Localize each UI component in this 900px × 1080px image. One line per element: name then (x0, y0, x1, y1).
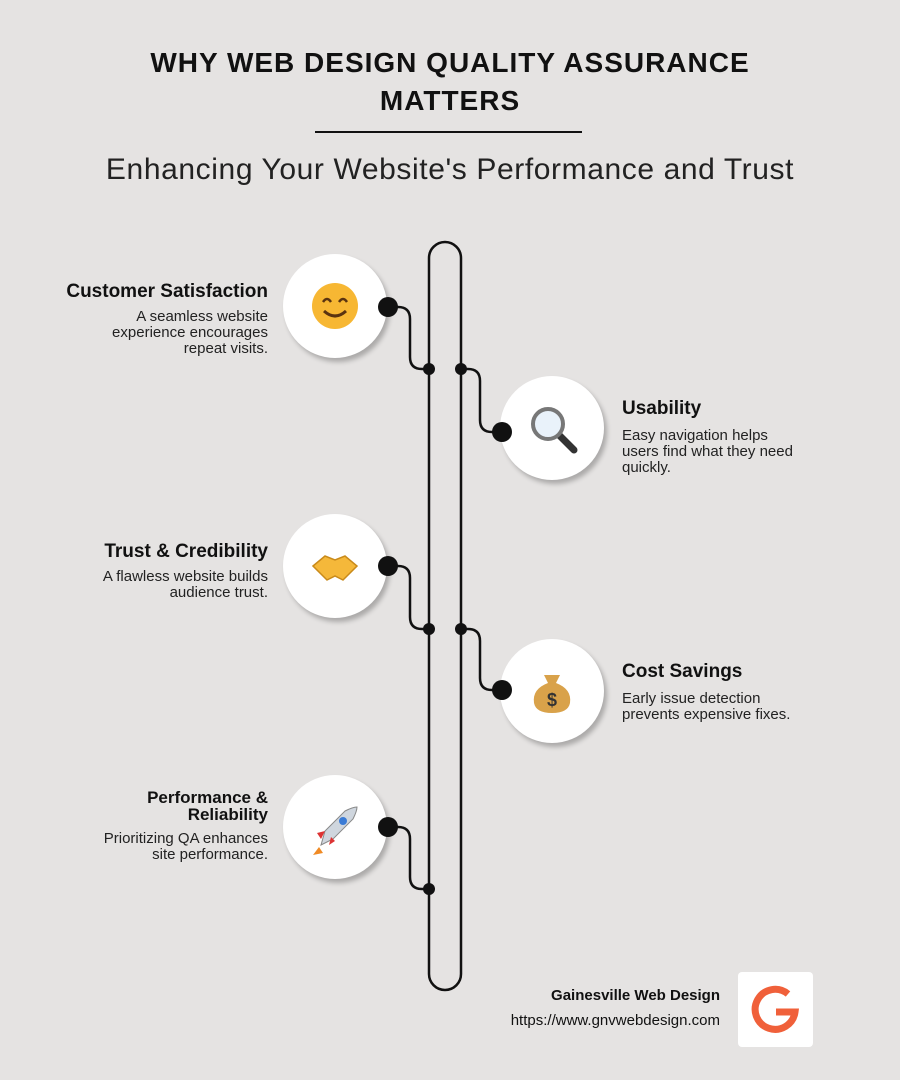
panel: trust: A flawless website builds audience trust. (103, 568, 268, 601)
panel: usability (622, 398, 793, 476)
panel: performance: Prioritizing QA enhances site performance. (104, 830, 268, 863)
title: WHY WEB DESIGN QUALITY ASSURANCE (150, 47, 750, 78)
icon: magnifier (500, 376, 604, 480)
panel: customer satisfaction: Customer Satisfaction (66, 281, 268, 302)
panel: performance: Reliability (188, 805, 268, 824)
footer: company: Gainesville Web Design (551, 987, 720, 1004)
panel: performance: Performance & (147, 788, 268, 807)
icon: smiley (283, 254, 387, 358)
title: MATTERS (380, 85, 520, 116)
panel: trust (103, 541, 268, 601)
subtitle: Enhancing Your Website's Performance and Trust (106, 153, 794, 186)
panel: usability: Usability (622, 398, 701, 419)
icon: handshake (283, 514, 387, 618)
logo (738, 972, 813, 1047)
panel: cost savings: Cost Savings (622, 661, 742, 682)
icon: rocket (283, 775, 387, 879)
panel: customer satisfaction (66, 281, 268, 357)
footer: company: https://www.gnvwebdesign.com (511, 1012, 720, 1029)
footer: company (511, 987, 720, 1029)
panel: customer satisfaction: A seamless website experience encourages repeat visits. (112, 308, 268, 357)
title (150, 47, 750, 116)
panel: cost savings: Early issue detection prevents expensive fixes. (622, 690, 790, 723)
icon: money bag (500, 639, 604, 743)
panel: performance (104, 788, 268, 863)
panel: usability: Easy navigation helps users find what they need quickly. (622, 427, 793, 476)
panel: cost savings (622, 661, 790, 723)
icon: money bag: $ (547, 690, 557, 710)
panel: trust: Trust & Credibility (104, 541, 268, 562)
